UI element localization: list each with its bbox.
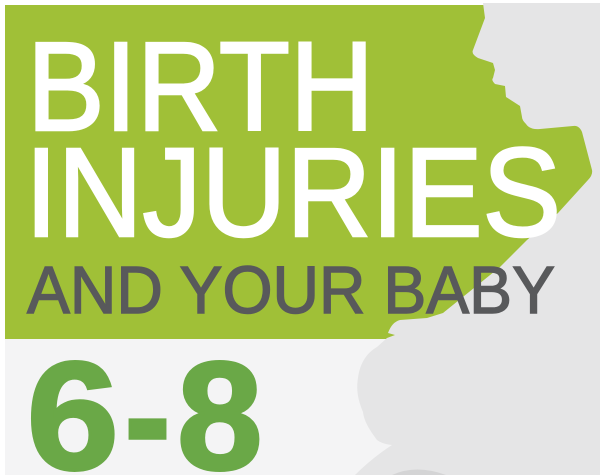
silhouette: mother and baby profile [355,3,600,475]
panel: green title block [5,5,600,339]
subheading: and your baby: AND YOUR BABY [27,253,555,328]
age range number [26,330,263,475]
heading: BIRTH: BIRTH [27,16,374,157]
heading: INJURIES: INJURIES [25,122,561,263]
panel: light lower background [5,339,600,475]
icon: baby shadow detail [392,470,446,475]
